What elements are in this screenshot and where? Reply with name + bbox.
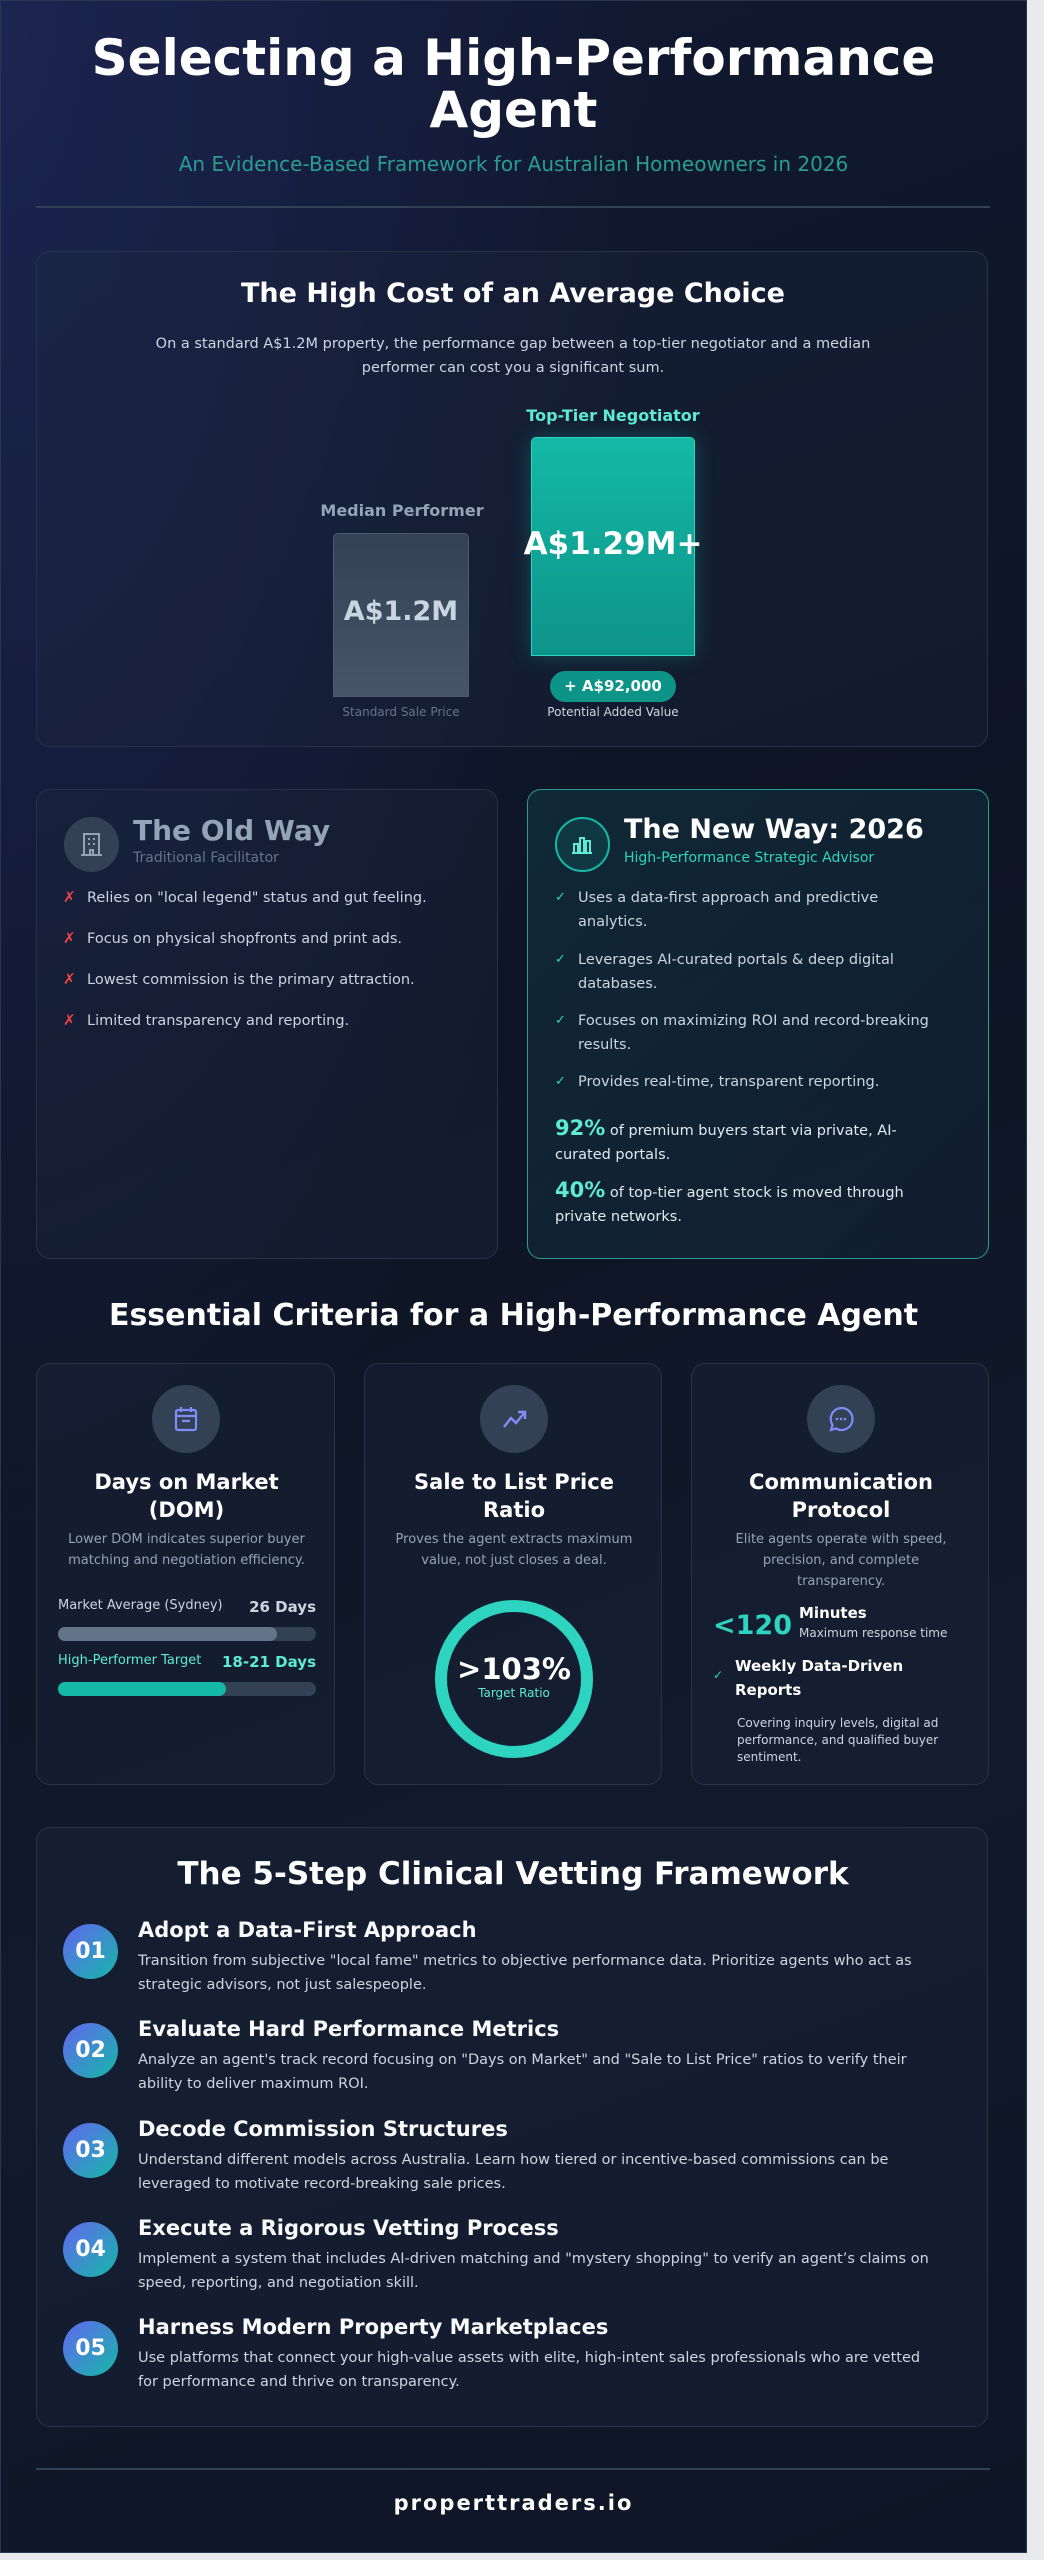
title: (DOM) xyxy=(149,1498,224,1522)
title xyxy=(94,1470,279,1522)
pill: + A$92,000 xyxy=(564,677,662,695)
title: Agent xyxy=(430,81,597,139)
list: Lowest commission is the primary attraction. xyxy=(87,972,415,988)
footer: properttraders.io xyxy=(394,2491,633,2515)
bars: High-Performer Target xyxy=(58,1653,201,1668)
bars xyxy=(58,1598,316,1696)
step 04: Execute a Rigorous Vetting Process xyxy=(138,2216,559,2240)
stat: 120 minutes: <120 xyxy=(713,1610,792,1641)
step 02: Evaluate Hard Performance Metrics xyxy=(138,2017,559,2041)
title: Sale to List Price xyxy=(414,1470,614,1494)
title: Communication xyxy=(749,1470,933,1494)
card: sale to list xyxy=(364,1363,662,1785)
description: On a standard A$1.2M property, the performance gap between a top-tier negotiator and a median performer can cost you a significant sum. xyxy=(156,336,870,376)
top tier bar: A$1.29M+ xyxy=(524,526,702,562)
icon: chart xyxy=(555,817,610,872)
weekly reports: Covering inquiry levels, digital ad performance, and qualified buyer sentiment. xyxy=(737,1716,938,1764)
title: Ratio xyxy=(483,1498,545,1522)
list: Leverages AI-curated portals & deep digital databases. xyxy=(578,952,894,992)
list: Focuses on maximizing ROI and record-breaking results. xyxy=(578,1013,929,1053)
card: DOM xyxy=(36,1363,335,1785)
panel: new way: High-Performance Strategic Advisor xyxy=(624,850,874,866)
panel: new way xyxy=(527,789,989,1259)
heading: The High Cost of an Average Choice xyxy=(241,278,785,309)
stat: 92%: 92% of premium buyers start via private, AI-curated portals. xyxy=(555,1116,897,1163)
weekly reports: Weekly Data-Driven xyxy=(735,1657,903,1675)
top tier bar xyxy=(531,437,695,656)
pill xyxy=(550,671,676,702)
step 04 xyxy=(63,2216,929,2291)
list: Uses a data-first approach and predictive analytics. xyxy=(578,890,878,930)
heading: The New Way: 2026 xyxy=(624,814,924,845)
step 02 xyxy=(63,2017,907,2092)
bars: Market Average (Sydney) xyxy=(58,1598,223,1613)
panel: old way: Traditional Facilitator xyxy=(133,850,279,866)
title: Protocol xyxy=(792,1498,890,1522)
panel: old way xyxy=(36,789,498,1259)
weekly reports: ✓ xyxy=(713,1668,723,1682)
title xyxy=(92,29,935,139)
bar chart xyxy=(320,406,704,719)
list: ✗ xyxy=(63,888,76,906)
weekly reports: Reports xyxy=(735,1681,801,1699)
step 01: Adopt a Data-First Approach xyxy=(138,1918,477,1942)
list: Relies on "local legend" status and gut feeling. xyxy=(87,890,427,906)
icon: building xyxy=(64,817,119,872)
step 05 xyxy=(63,2315,920,2390)
card: sale to list: Proves the agent extracts maximum value, not just closes a deal. xyxy=(396,1532,632,1568)
step 01: Transition from subjective "local fame" metrics to objective performance data. Prioritize agents who act as strategic advisors, not just salespeople. xyxy=(138,1953,912,1993)
stat: 120 minutes: Minutes xyxy=(799,1604,867,1622)
list: ✗ xyxy=(63,970,76,988)
step 05: Harness Modern Property Marketplaces xyxy=(138,2315,608,2339)
median label: Median Performer xyxy=(320,501,484,520)
median bar xyxy=(333,533,469,697)
list: Provides real-time, transparent reporting. xyxy=(578,1074,879,1090)
card: communication: Elite agents operate with speed, precision, and complete transparency. xyxy=(736,1532,946,1589)
step 03: Understand different models across Australia. Learn how tiered or incentive-based commissions can be leveraged to motivate record-breaking sale prices. xyxy=(138,2152,888,2192)
step 03 xyxy=(63,2117,888,2192)
list: ✓ xyxy=(555,1013,566,1028)
step 04: 04 xyxy=(75,2237,106,2262)
list: ✓ xyxy=(555,952,566,967)
step 01 xyxy=(63,1918,912,1993)
top tier label: Top-Tier Negotiator xyxy=(526,406,700,425)
median caption: Standard Sale Price xyxy=(342,705,460,719)
subtitle: An Evidence-Based Framework for Australian Homeowners in 2026 xyxy=(179,152,848,176)
list: ✗ xyxy=(63,929,76,947)
median bar: A$1.2M xyxy=(344,596,458,627)
list: Limited transparency and reporting. xyxy=(87,1013,349,1029)
weekly reports xyxy=(713,1657,938,1764)
card: communication xyxy=(691,1363,989,1785)
stat: 120 minutes xyxy=(713,1604,947,1641)
ring chart: Target Ratio xyxy=(478,1686,550,1700)
ring chart: >103% xyxy=(457,1652,571,1686)
heading: The 5-Step Clinical Vetting Framework xyxy=(177,1856,849,1892)
list: ✓ xyxy=(555,1074,566,1089)
stat: 120 minutes: Maximum response time xyxy=(799,1626,947,1640)
icon: chat xyxy=(807,1385,875,1453)
title xyxy=(749,1470,933,1522)
list xyxy=(63,888,427,1029)
bars: 26 Days xyxy=(249,1598,316,1616)
list: Focus on physical shopfronts and print ads. xyxy=(87,931,402,947)
icon: calendar xyxy=(152,1385,220,1453)
step 05: Use platforms that connect your high-value assets with elite, high-intent sales professionals who are vetted for performance and thrive on transparency. xyxy=(138,2350,920,2390)
step 02: 02 xyxy=(75,2038,106,2063)
card: DOM: Lower DOM indicates superior buyer matching and negotiation efficiency. xyxy=(68,1532,305,1568)
step 04: Implement a system that includes AI-driven matching and "mystery shopping" to verify an agent’s claims on speed, reporting, and negotiation skill. xyxy=(138,2251,929,2291)
step 05: 05 xyxy=(75,2336,106,2361)
icon: trend xyxy=(480,1385,548,1453)
ring chart xyxy=(435,1600,593,1758)
step 03: Decode Commission Structures xyxy=(138,2117,508,2141)
list: ✓ xyxy=(555,890,566,905)
top caption: Potential Added Value xyxy=(547,705,679,719)
bars: 18-21 Days xyxy=(222,1653,316,1671)
stat: 40%: 40% of top-tier agent stock is moved through private networks. xyxy=(555,1178,904,1225)
section heading: criteria: Essential Criteria for a High-Performance Agent xyxy=(109,1298,918,1333)
step 03: 03 xyxy=(75,2138,106,2163)
list xyxy=(555,890,929,1090)
panel: high cost xyxy=(36,251,988,747)
step 01: 01 xyxy=(75,1939,106,1964)
panel: 5-step framework xyxy=(36,1827,988,2427)
heading: The Old Way xyxy=(133,814,330,847)
title xyxy=(414,1470,614,1522)
title: Days on Market xyxy=(94,1470,279,1494)
title: Selecting a High-Performance xyxy=(92,29,935,87)
list: ✗ xyxy=(63,1011,76,1029)
step 02: Analyze an agent's track record focusing on "Days on Market" and "Sale to List Price" ratios to verify their ability to deliver maximum ROI. xyxy=(138,2052,907,2092)
